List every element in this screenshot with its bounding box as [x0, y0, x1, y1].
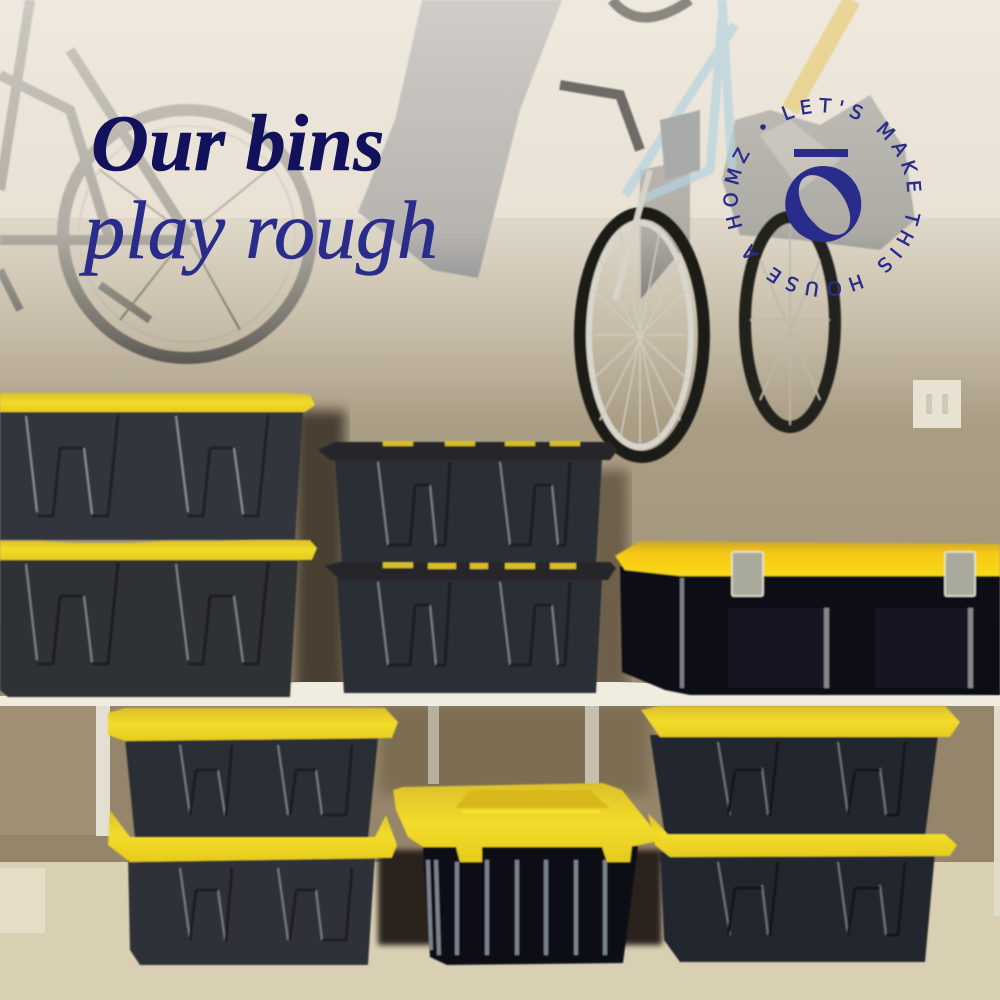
right bike saddle shadow: [722, 95, 915, 250]
leg of person: [358, 0, 562, 278]
bin: right lower lower: [648, 813, 957, 962]
title: [79, 100, 438, 276]
bin: centre front with ribbed body: [393, 783, 662, 965]
white fade overlay: [0, 0, 1000, 420]
bin: large right with metal latches: [615, 541, 1000, 695]
bin: centre upper with tabs: [318, 441, 618, 566]
bullet dot: [760, 124, 766, 130]
left bicycle: [0, 0, 311, 358]
photo: hanging bicycles: [0, 0, 915, 358]
bin: lower left upper: [108, 708, 398, 838]
rear bicycle wheel: [745, 217, 835, 427]
circular slogan: LET'S MAKE THIS HOUSE A HOMZ: [723, 98, 922, 297]
bin: top left lower: [0, 540, 317, 697]
bin: top left upper: [0, 393, 315, 540]
bin: lower left lower: [108, 810, 397, 965]
wall outlet: [913, 380, 961, 428]
shelf: [0, 682, 1000, 916]
logo macron bar: [794, 149, 848, 157]
blue bicycle frame and yellow bike frame: [560, 0, 852, 200]
metal latch right: [945, 552, 975, 596]
front bicycle wheel: [580, 170, 704, 457]
title line 1: Our bins: [91, 100, 385, 188]
badge: circular logo: [723, 98, 922, 297]
metal latch left: [732, 552, 763, 596]
logo letter o: [785, 166, 861, 242]
title line 2: play rough: [79, 184, 438, 276]
bin: centre lower with tabs: [325, 562, 616, 693]
bin: right lower upper: [641, 706, 960, 836]
